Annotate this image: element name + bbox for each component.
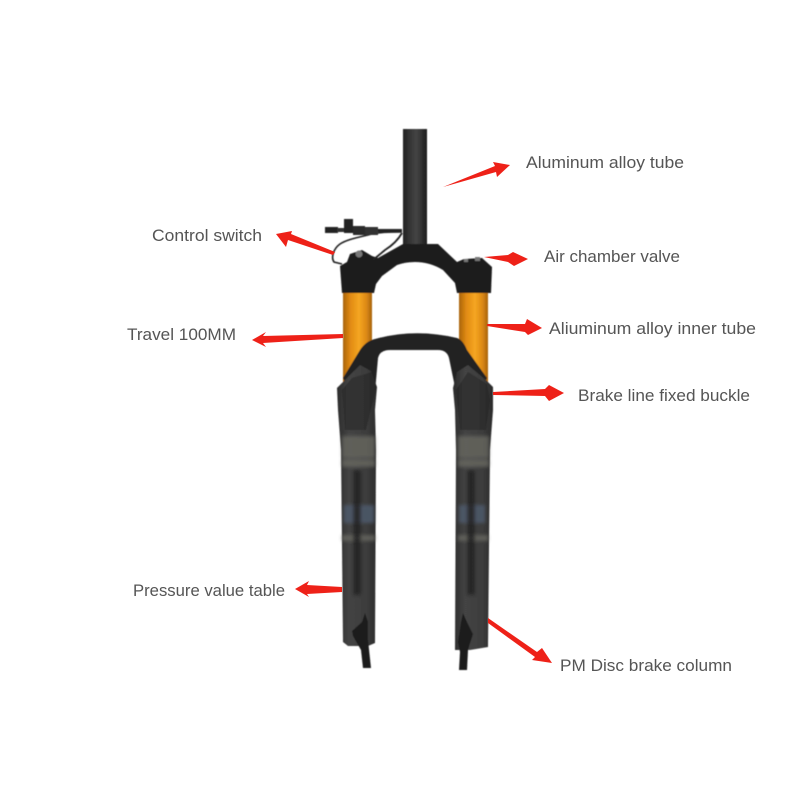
arrow: pressure value table: [295, 581, 342, 597]
label: pressure value table: Pressure value table: [133, 581, 285, 600]
steerer tube: [403, 129, 427, 247]
label: PM disc brake column: PM Disc brake column: [560, 656, 732, 675]
label: control switch: Control switch: [152, 226, 262, 245]
arrow: control switch: [276, 231, 335, 255]
left orange inner tube: [343, 292, 372, 387]
labels: [127, 153, 756, 675]
arrows: [252, 162, 564, 663]
left disc mount: [352, 613, 371, 668]
arrow: aluminium inner tube: [487, 319, 542, 335]
leg graphics: [342, 436, 489, 595]
arrow: air chamber valve: [484, 252, 528, 266]
right lower leg: [453, 365, 493, 650]
arrow: PM disc brake column: [488, 618, 552, 663]
lower arch and shoulders: [343, 333, 487, 392]
left lower leg: [337, 365, 377, 646]
shoulder shading: [342, 372, 490, 430]
label: aluminum alloy tube: Aluminum alloy tube: [526, 153, 684, 172]
label: travel 100MM: Travel 100MM: [127, 325, 236, 344]
right disc mount: [458, 613, 473, 670]
control switch and cable: [325, 219, 402, 264]
right orange inner tube: [459, 292, 488, 387]
label: brake line fixed buckle: Brake line fixed buckle: [578, 386, 750, 405]
arrow: aluminum alloy tube: [443, 162, 510, 187]
crown: [340, 244, 492, 293]
arrow: brake line fixed buckle: [493, 385, 564, 401]
crown valve caps: [356, 250, 480, 262]
label: air chamber valve: Air chamber valve: [544, 247, 680, 266]
arrow: travel 100MM: [252, 332, 343, 347]
fork illustration: [325, 129, 493, 670]
label: inner tube: Aliuminum alloy inner tube: [549, 319, 756, 338]
